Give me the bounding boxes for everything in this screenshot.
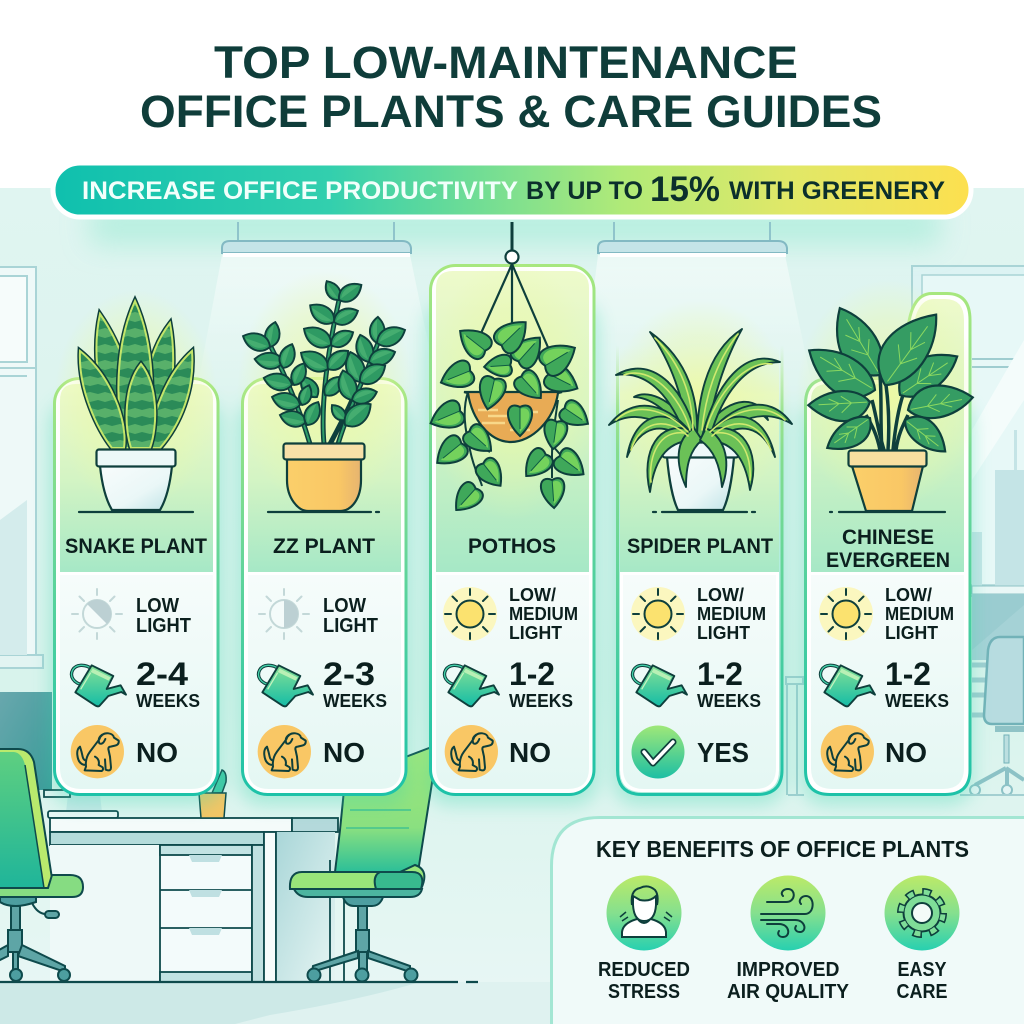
benefit labels [598,958,948,1003]
ceiling lights [195,222,815,400]
icon: reduced stress [606,876,682,950]
icon: spider leaf highlights [616,334,785,482]
title [140,37,882,137]
benefit labels: REDUCED [598,958,690,981]
icon: low light sun [72,589,122,639]
benefit labels: AIR QUALITY [727,980,849,1003]
light text: LIGHT [509,623,562,643]
icon: chinese evergreen plant [798,300,975,460]
light text [136,595,191,637]
watering frequency: WEEKS [885,691,949,711]
panel: zz plant card [237,270,413,794]
floor line [0,981,478,983]
title: OFFICE PLANTS & CARE GUIDES [140,86,882,137]
panel: chinese evergreen card [796,280,980,794]
icon: medium light sun [819,587,873,641]
right desk, monitor and chair [786,586,1024,795]
plant name: SNAKE PLANT [65,535,207,558]
watering frequency: WEEKS [697,691,761,711]
productivity banner: BY UP TO [526,177,643,205]
plant name: SPIDER PLANT [627,535,773,558]
plant name: ZZ PLANT [273,535,375,558]
icon: snake plant [80,301,192,448]
icon: white pot [79,450,193,512]
icon: watering can [259,665,313,706]
icon: pet unsafe [258,725,311,778]
benefit labels: IMPROVED [736,958,840,981]
icon: zz plant [240,278,409,444]
watering frequency: WEEKS [136,691,200,711]
benefit labels: CARE [896,980,948,1003]
icon: watering can [72,665,126,706]
plant name [826,526,950,572]
pet safe value: NO [323,737,365,768]
icon: watering can [445,665,499,706]
icon: hanging pothos [425,222,594,518]
icon: improved air quality [750,876,826,950]
light text: LIGHT [697,623,750,643]
right window and city [912,266,1024,596]
light text [697,585,766,643]
watering frequency: 2-4 [136,656,188,692]
left monitor [0,692,52,790]
light text [509,585,578,643]
watering frequency: 2-3 [323,656,375,692]
light text: LOW/ [885,585,932,605]
benefits heading: KEY BENEFITS OF OFFICE PLANTS [596,836,969,862]
card shadows [50,300,973,805]
office desk [44,790,344,982]
light text: MEDIUM [697,604,766,624]
light text: MEDIUM [509,604,578,624]
plant name: CHINESE [842,526,934,549]
icon: pet unsafe [821,725,874,778]
icon: medium light sun [443,587,497,641]
productivity banner: INCREASE OFFICE PRODUCTIVITY [82,177,518,205]
title: TOP LOW-MAINTENANCE [214,37,798,88]
icon: watering can [633,665,687,706]
pet safe value: YES [697,737,749,768]
pet safe value: NO [136,737,178,768]
right office chair [290,745,437,982]
watering frequency [885,656,949,711]
light text [885,585,954,643]
light text: LOW [136,595,179,617]
icon: pet unsafe [445,725,498,778]
watering frequency [697,656,761,711]
productivity banner [53,163,971,217]
icon: white pot [653,442,755,512]
panel: pothos card [424,222,600,794]
pet safe value: NO [509,737,551,768]
watering frequency: WEEKS [323,691,387,711]
benefit labels: STRESS [608,980,680,1003]
icon: easy care gear [884,876,960,950]
icon: medium light sun [631,587,685,641]
panel: spider plant card [608,300,792,794]
icon: pet safe check [632,726,684,778]
icon: spider plant blades [609,329,792,457]
productivity banner: WITH GREENERY [729,177,945,205]
panel: snake plant card [54,290,218,794]
icon: watering can [821,665,875,706]
light text: LIGHT [323,615,378,637]
icon: orange pot [830,450,945,512]
left office chair [0,749,83,981]
light text: LOW/ [697,585,744,605]
light text: LIGHT [885,623,938,643]
left window [0,267,43,668]
banner glow [90,205,940,245]
watering frequency [509,656,573,711]
watering frequency: WEEKS [509,691,573,711]
plant name: EVERGREEN [826,549,950,572]
light text: MEDIUM [885,604,954,624]
panel: key benefits [552,818,1024,1024]
watering frequency [323,656,387,711]
watering frequency [136,656,200,711]
light text: LOW/ [509,585,556,605]
light text: LIGHT [136,615,191,637]
light text [323,595,378,637]
icon: low light sun [259,589,309,639]
icon: pet unsafe [71,725,124,778]
watering frequency: 1-2 [885,656,931,692]
watering frequency: 1-2 [509,656,555,692]
benefit labels: EASY [898,958,947,981]
watering frequency: 1-2 [697,656,743,692]
productivity banner: 15% [650,170,720,209]
icon: front spider blades [647,428,753,492]
pencil cup [199,770,226,818]
light text: LOW [323,595,366,617]
icon: orange pot [268,444,379,512]
pet safe value: NO [885,737,927,768]
plant name: POTHOS [468,535,556,558]
